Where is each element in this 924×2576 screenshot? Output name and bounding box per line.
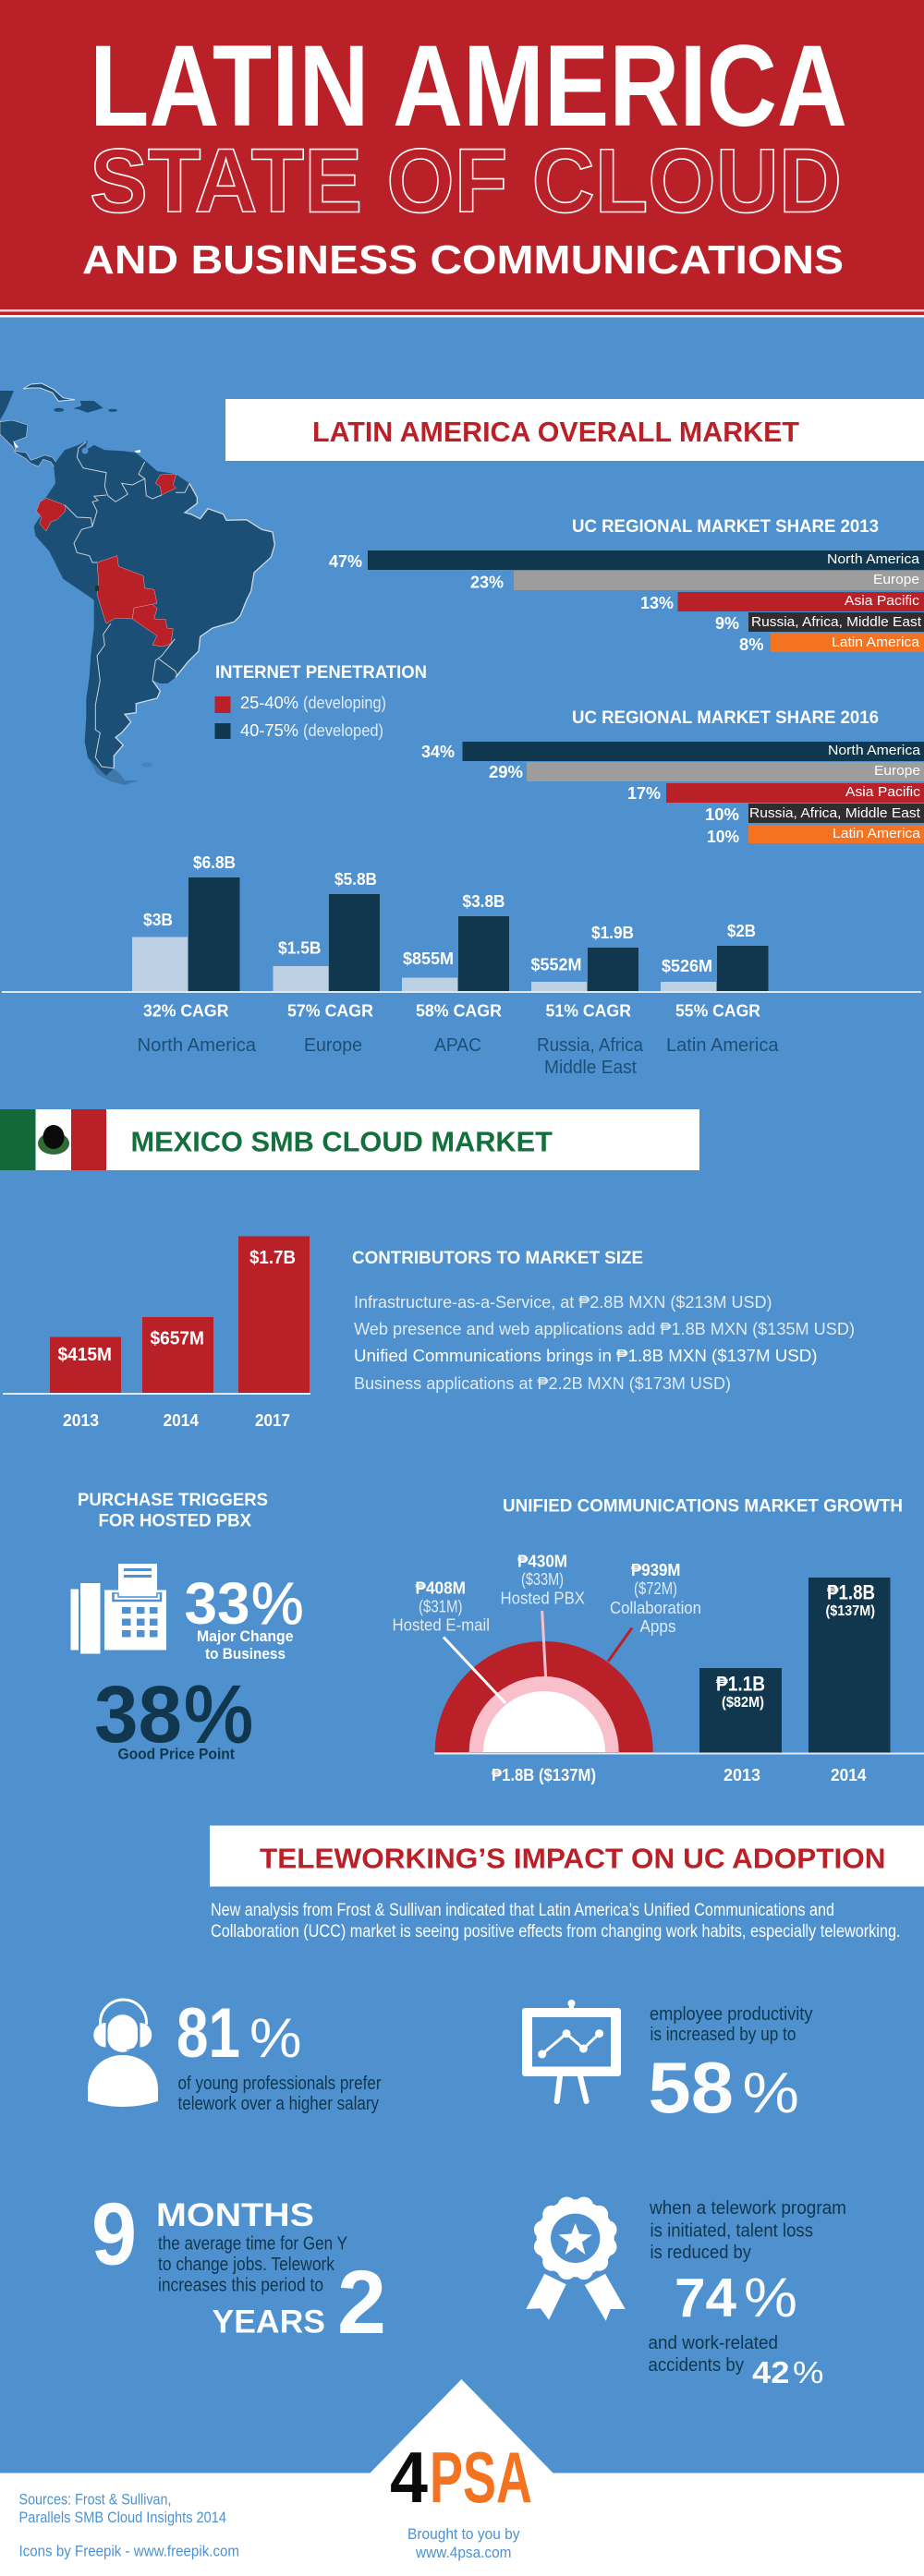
panel: talent loss and accidents reduced: when a telework program xyxy=(649,2198,846,2219)
panel: purchase triggers for hosted PBX xyxy=(70,1491,303,1762)
footer panel xyxy=(0,2379,924,2576)
icon: award rosette xyxy=(526,2194,626,2321)
bar chart: regional market growth and CAGR: Russia, Africa xyxy=(537,1035,644,1056)
bar chart: Mexico SMB cloud market size: 2014 xyxy=(163,1411,199,1430)
chart: UC regional market share 2013: Asia Pacific xyxy=(845,593,920,609)
bar chart: regional market growth and CAGR: Latin America xyxy=(666,1035,779,1056)
panel: talent loss and accidents reduced: 74 xyxy=(675,2268,736,2328)
heading: purchase triggers: FOR HOSTED PBX xyxy=(98,1511,251,1531)
chart: UC regional market share 2016: UC REGIONAL MARKET SHARE 2016 xyxy=(572,708,879,728)
text block: sources and credits: Icons by Freepik - www.freepik.com xyxy=(18,2542,239,2560)
bar chart: regional market growth and CAGR xyxy=(2,853,921,1078)
title: State of Cloud outlined: STATE OF CLOUD xyxy=(90,129,842,231)
legend: internet penetration: 25-40% xyxy=(240,694,298,712)
panel: 81 percent prefer telework: telework over a higher salary xyxy=(177,2094,379,2114)
bar chart: regional market growth and CAGR: 57% CAGR xyxy=(287,1001,373,1020)
bar chart: unified communications 2013 and 2014: ₱1.1B xyxy=(716,1672,765,1696)
legend: internet penetration: INTERNET PENETRATION xyxy=(215,663,427,683)
bar chart: regional market growth and CAGR: $526M xyxy=(662,957,712,975)
section banner: Latin America overall market xyxy=(225,399,924,461)
bar chart: regional market growth and CAGR: APAC xyxy=(434,1035,481,1056)
legend: internet penetration: (developed) xyxy=(303,721,383,740)
icon: person with headset xyxy=(88,2000,158,2107)
panel: 58 percent productivity: is increased by up to xyxy=(650,2025,796,2045)
chart: UC regional market share 2016: 17% xyxy=(627,784,661,803)
bar chart: unified communications 2013 and 2014: ₱1.8B xyxy=(827,1581,875,1603)
chart: UC regional market share 2016: 10% xyxy=(705,805,739,824)
bar chart: Mexico SMB cloud market size: 2017 xyxy=(255,1411,290,1430)
chart: UC regional market share 2013: Latin America xyxy=(832,635,920,650)
heading: purchase triggers: PURCHASE TRIGGERS xyxy=(78,1491,268,1510)
text block: contributors to market size: Web presence and web applications add ₱1.8B MXN ($135M USD) xyxy=(354,1320,855,1338)
chart: arc breakdown of unified communications market: Collaboration xyxy=(610,1599,701,1617)
text block: contributors to market size: Infrastructure-as-a-Service, at ₱2.8B MXN ($213M USD) xyxy=(354,1293,772,1312)
chart: UC regional market share 2016: Asia Pacific xyxy=(845,784,921,800)
chart: arc breakdown of unified communications market: ($31M) xyxy=(419,1598,462,1616)
chart: arc breakdown of unified communications market: ₱939M xyxy=(631,1561,680,1579)
chart: arc breakdown of unified communications market: Hosted E-mail xyxy=(392,1616,490,1635)
panel: talent loss and accidents reduced xyxy=(526,2194,846,2389)
panel: 58 percent productivity: % xyxy=(743,2062,799,2125)
chart: arc breakdown of unified communications market: ($33M) xyxy=(521,1570,564,1589)
panel: 9 months to 2 years: increases this period to xyxy=(158,2276,323,2296)
title: And Business Communications: AND BUSINESS COMMUNICATIONS xyxy=(82,237,844,283)
stat: 33 percent major change: 33 xyxy=(185,1570,249,1637)
text block: contributors to market size xyxy=(352,1249,855,1393)
icon: fax machine xyxy=(70,1564,166,1653)
text block: contributors to market size: Unified Communications brings in ₱1.8B MXN ($137M USD) xyxy=(354,1347,817,1365)
panel: 81 percent prefer telework: 81 xyxy=(176,1994,240,2073)
red countries xyxy=(36,474,176,647)
text block: sources and credits xyxy=(18,2490,520,2561)
panel: 58 percent productivity: employee productivity xyxy=(650,2004,813,2025)
bar chart: regional market growth and CAGR: Middle East xyxy=(544,1058,637,1078)
chart: UC regional market share 2013: 8% xyxy=(739,635,763,654)
text block: contributors to market size: CONTRIBUTORS TO MARKET SIZE xyxy=(352,1249,643,1268)
chart: arc breakdown of unified communications market: ₱408M xyxy=(416,1579,466,1598)
chart: UC regional market share 2016: Russia, Africa, Middle East xyxy=(749,805,921,821)
bar chart: unified communications 2013 and 2014 xyxy=(434,1578,924,1784)
bar chart: regional market growth and CAGR: 32% CAGR xyxy=(143,1001,229,1020)
bar chart: unified communications 2013 and 2014: 2014 xyxy=(831,1766,867,1784)
panel: 9 months to 2 years: MONTHS xyxy=(156,2197,314,2233)
stat: 33 percent major change: % xyxy=(251,1570,303,1637)
heading: unified communications market growth: UNIFIED COMMUNICATIONS MARKET GROWTH xyxy=(503,1496,903,1517)
chart: UC regional market share 2013: North America xyxy=(827,551,920,567)
stat: 38 percent good price point xyxy=(94,1670,253,1762)
panel: talent loss and accidents reduced: % xyxy=(793,2355,824,2389)
chart: UC regional market share 2013: UC REGIONAL MARKET SHARE 2013 xyxy=(572,517,879,537)
chart: UC regional market share 2016: 29% xyxy=(489,763,523,781)
panel: 58 percent productivity xyxy=(522,2000,813,2128)
panel: 9 months to 2 years xyxy=(91,2185,386,2352)
section banner: Mexico SMB cloud market xyxy=(0,1109,699,1170)
panel: talent loss and accidents reduced: accidents by xyxy=(649,2355,744,2376)
panel: 9 months to 2 years: YEARS xyxy=(213,2304,325,2340)
text block: Frost and Sullivan analysis: New analysis from Frost & Sullivan indicated that Latin America’s Unified Communications and xyxy=(211,1901,834,1920)
panel: 81 percent prefer telework: of young professionals prefer xyxy=(177,2074,382,2094)
text block: sources and credits: www.4psa.com xyxy=(415,2544,512,2561)
bar chart: regional market growth and CAGR: North America xyxy=(137,1035,257,1056)
heading: purchase triggers xyxy=(78,1491,268,1531)
stat: 38 percent good price point: 38 xyxy=(94,1670,182,1760)
chart: UC regional market share 2013: 47% xyxy=(329,552,362,571)
chart: UC regional market share 2016: North America xyxy=(828,743,921,758)
panel: 9 months to 2 years: 9 xyxy=(91,2185,137,2283)
bar chart: regional market growth and CAGR: 51% CAGR xyxy=(545,1001,631,1020)
legend: internet penetration: 40-75% xyxy=(240,721,298,740)
legend: internet penetration: (developing) xyxy=(303,694,386,712)
chart: UC regional market share 2016: 10% xyxy=(707,828,739,846)
bar chart: regional market growth and CAGR: $3B xyxy=(143,911,173,929)
bar chart: unified communications 2013 and 2014: 2013 xyxy=(723,1766,760,1784)
panel: talent loss and accidents reduced: is initiated, talent loss xyxy=(650,2220,813,2241)
panel: talent loss and accidents reduced: and work-related xyxy=(649,2333,778,2353)
bar chart: Mexico SMB cloud market size xyxy=(3,1236,310,1430)
text block: sources and credits: Brought to you by xyxy=(407,2525,520,2543)
icon: Mexican flag xyxy=(0,1109,106,1170)
section banner: Mexico SMB cloud market: MEXICO SMB CLOUD MARKET xyxy=(131,1127,553,1158)
text block: sources and credits: Sources: Frost & Sullivan, xyxy=(18,2490,172,2509)
bar chart: regional market growth and CAGR: $552M xyxy=(530,955,582,974)
section banner: Latin America overall market: LATIN AMERICA OVERALL MARKET xyxy=(312,417,799,448)
stat: 33 percent major change xyxy=(185,1570,303,1663)
logo: 4PSA: PSA xyxy=(430,2437,532,2518)
logo: 4PSA: 4 xyxy=(390,2437,428,2518)
bar chart: regional market growth and CAGR: $855M xyxy=(403,949,454,968)
header banner xyxy=(0,0,924,318)
chart: arc breakdown of unified communications market: ₱1.8B ($137M) xyxy=(492,1766,596,1784)
chart: arc breakdown of unified communications market: Apps xyxy=(639,1617,676,1636)
panel: 81 percent prefer telework: % xyxy=(249,2007,301,2069)
bar chart: regional market growth and CAGR: $1.5B xyxy=(278,938,322,957)
bar chart: Mexico SMB cloud market size: $657M xyxy=(150,1328,204,1348)
bar chart: regional market growth and CAGR: 55% CAGR xyxy=(675,1001,760,1020)
bar chart: unified communications 2013 and 2014: ($137M) xyxy=(826,1603,875,1619)
panel: talent loss and accidents reduced: % xyxy=(744,2267,797,2328)
bar chart: Mexico SMB cloud market size: $415M xyxy=(57,1345,112,1365)
stat: 38 percent good price point: % xyxy=(184,1670,253,1760)
chart: arc breakdown of unified communications market: ₱430M xyxy=(517,1552,567,1570)
bar chart: regional market growth and CAGR: $1.9B xyxy=(591,924,634,942)
panel: 58 percent productivity: 58 xyxy=(649,2047,734,2128)
chart: UC regional market share 2016: 34% xyxy=(421,743,455,761)
bar chart: unified communications 2013 and 2014: ($82M) xyxy=(722,1695,764,1711)
chart: UC regional market share 2016: Latin America xyxy=(833,826,921,841)
chart: UC regional market share 2016 xyxy=(421,708,924,846)
chart: arc breakdown of unified communications market xyxy=(392,1552,701,1784)
stat: 38 percent good price point: Good Price Point xyxy=(118,1746,235,1762)
bar chart: Mexico SMB cloud market size: $1.7B xyxy=(249,1248,296,1268)
section banner: teleworking impact xyxy=(210,1825,924,1886)
panel: 9 months to 2 years: to change jobs. Telework xyxy=(158,2255,335,2275)
chart: UC regional market share 2013: 9% xyxy=(715,614,739,633)
bar chart: regional market growth and CAGR: $2B xyxy=(727,922,756,940)
chart: arc breakdown of unified communications market: Hosted PBX xyxy=(501,1589,585,1607)
bar chart: regional market growth and CAGR: 58% CAGR xyxy=(416,1001,502,1020)
chart: UC regional market share 2013: Russia, Africa, Middle East xyxy=(751,614,922,630)
panel: talent loss and accidents reduced: 42 xyxy=(752,2355,789,2389)
text block: sources and credits: Parallels SMB Cloud Insights 2014 xyxy=(18,2509,226,2526)
stat: 33 percent major change: to Business xyxy=(205,1646,286,1663)
bar chart: Mexico SMB cloud market size: 2013 xyxy=(63,1411,99,1430)
borders xyxy=(65,441,189,768)
panel: 81 percent prefer telework xyxy=(88,1994,382,2114)
text block: contributors to market size: Business applications at ₱2.2B MXN ($173M USD) xyxy=(354,1374,731,1393)
stat: 33 percent major change: Major Change xyxy=(197,1628,294,1645)
bar chart: regional market growth and CAGR: $6.8B xyxy=(193,853,236,872)
chart: UC regional market share 2013: 13% xyxy=(640,594,674,612)
legend: internet penetration xyxy=(214,663,427,740)
bar chart: regional market growth and CAGR: Europe xyxy=(304,1035,362,1056)
panel: talent loss and accidents reduced: is reduced by xyxy=(650,2243,751,2263)
bar chart: regional market growth and CAGR: $3.8B xyxy=(462,892,505,911)
icon: presentation board with line graph xyxy=(522,2000,621,2101)
panel: 9 months to 2 years: 2 xyxy=(337,2252,386,2352)
chart: UC regional market share 2016: Europe xyxy=(874,763,920,779)
chart: arc breakdown of unified communications market: ($72M) xyxy=(634,1579,677,1598)
chart: UC regional market share 2013: 23% xyxy=(470,573,504,591)
section banner: teleworking impact: TELEWORKING’S IMPACT ON UC ADOPTION xyxy=(260,1844,885,1875)
bar chart: regional market growth and CAGR: $5.8B xyxy=(334,870,377,889)
map of South America xyxy=(0,383,274,785)
chart: UC regional market share 2013: Europe xyxy=(873,572,919,587)
logo: 4PSA xyxy=(390,2437,532,2518)
text block: Frost and Sullivan analysis xyxy=(211,1901,900,1941)
chart: UC regional market share 2013 xyxy=(329,517,924,654)
panel: 9 months to 2 years: the average time for Gen Y xyxy=(158,2233,347,2254)
